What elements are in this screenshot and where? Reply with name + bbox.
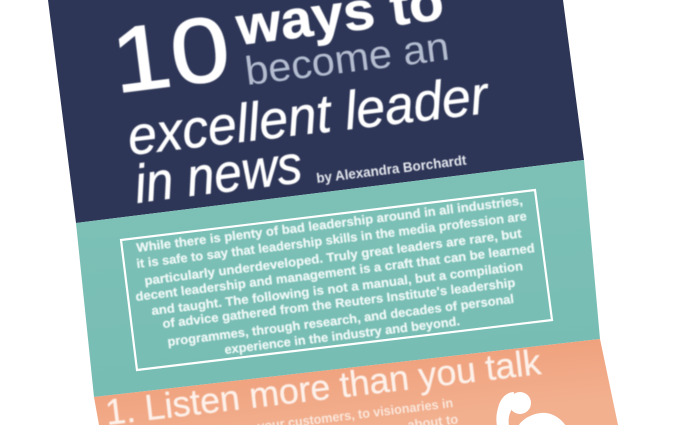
intro text: of advice gathered from the Reuters Institute's leadership	[162, 276, 516, 331]
intro text: decent leadership and management is a craft that can be learned	[135, 241, 535, 304]
intro text: and taught. The following is not a manual, but a compilation	[151, 259, 524, 318]
intro text: it is safe to say that leadership skills in the media profession are	[136, 209, 527, 271]
intro text: experience in the industry and beyond.	[224, 314, 461, 357]
icon: listening person	[496, 392, 566, 425]
intro text: While there is plenty of bad leadership around in all industries,	[136, 194, 523, 255]
panel: introduction	[76, 160, 600, 397]
panel: tip 1	[94, 339, 618, 425]
intro frame	[121, 190, 552, 370]
title: 10: 10	[106, 0, 236, 113]
title: become an: become an	[243, 25, 452, 94]
title: excellent leader: excellent leader	[124, 65, 493, 167]
intro text: particularly underdeveloped. Truly great leaders are rare, but	[144, 226, 523, 288]
byline: by Alexandra Borchardt	[316, 153, 468, 186]
intro text	[135, 194, 535, 357]
panel: title header	[48, 0, 584, 223]
title: in news: in news	[131, 134, 305, 215]
intro text: programmes, through research, and decades of personal	[167, 292, 515, 349]
